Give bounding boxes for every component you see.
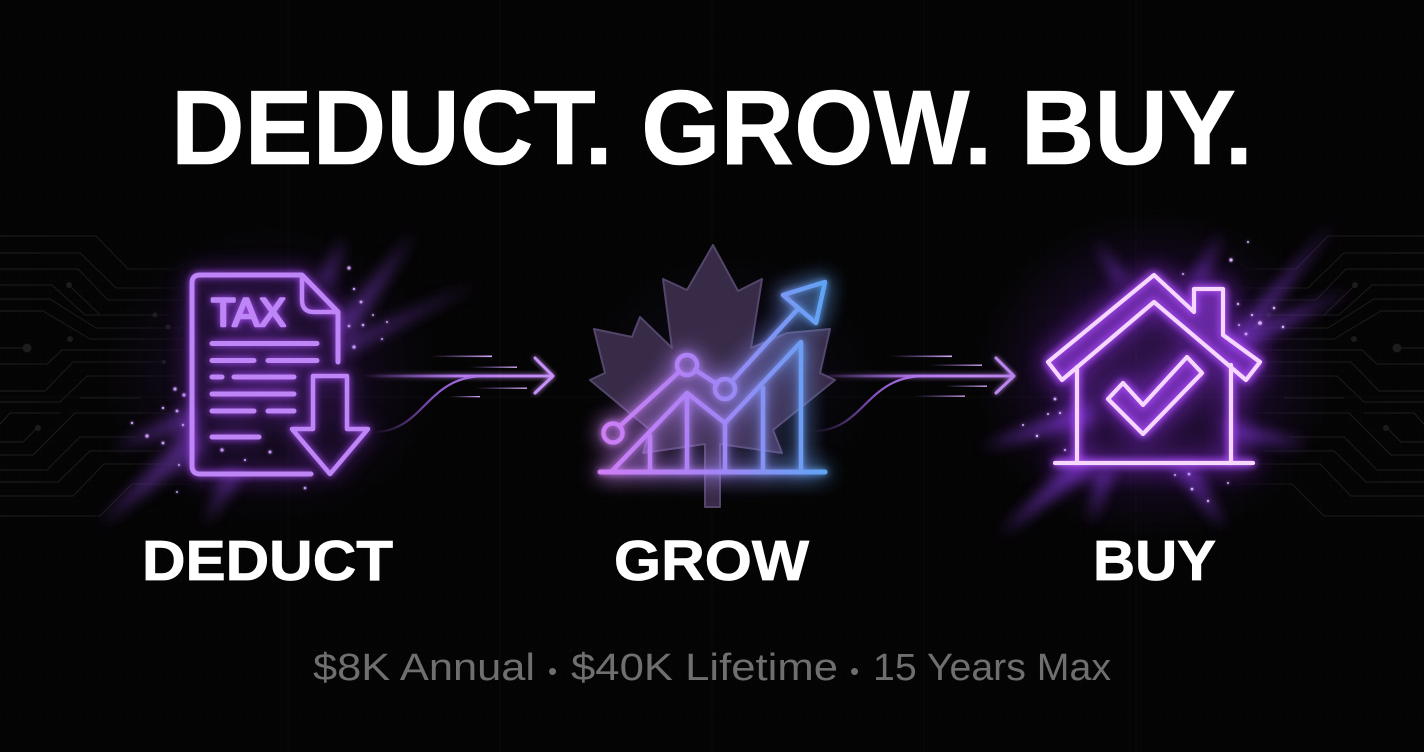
icon: tax document with down arrow [192,275,368,474]
icon: house with checkmark [1048,275,1260,463]
tax label: TAX [211,291,286,335]
arrow: deduct to grow [363,356,553,432]
document outline [192,275,338,474]
icon: growth chart [600,282,825,472]
trend arrowhead [783,282,825,323]
roof and chimney [1048,275,1260,380]
house base [1055,461,1253,465]
label: grow: GROW [614,529,809,593]
document text lines [212,344,317,437]
glow burst: buy [974,210,1350,540]
panel: buy [974,210,1350,593]
icon: maple leaf [590,245,835,507]
footer stats: • [548,656,557,686]
trend markers [604,424,622,442]
glow: grow [580,250,880,510]
glow burst: deduct [100,225,480,525]
panel: grow [580,245,880,593]
chart baseline [600,470,825,474]
house walls [1077,365,1231,463]
footer stats: 15 Years Max [873,647,1111,689]
label: buy: BUY [1093,529,1216,593]
footer stats: • [850,656,859,686]
checkmark [1108,357,1202,434]
footer stats: $8K Annual [313,647,535,689]
chart area outline [612,342,801,472]
footer stats: $40K Lifetime [571,647,838,689]
arrow: grow to buy [813,356,1014,431]
document fold [302,277,338,312]
title: DEDUCT. GROW. BUY. [171,69,1253,187]
down arrow [292,376,368,474]
panel: deduct [100,225,480,593]
footer stats [313,647,1111,689]
label: deduct: DEDUCT [142,529,393,593]
trend line [620,310,797,426]
